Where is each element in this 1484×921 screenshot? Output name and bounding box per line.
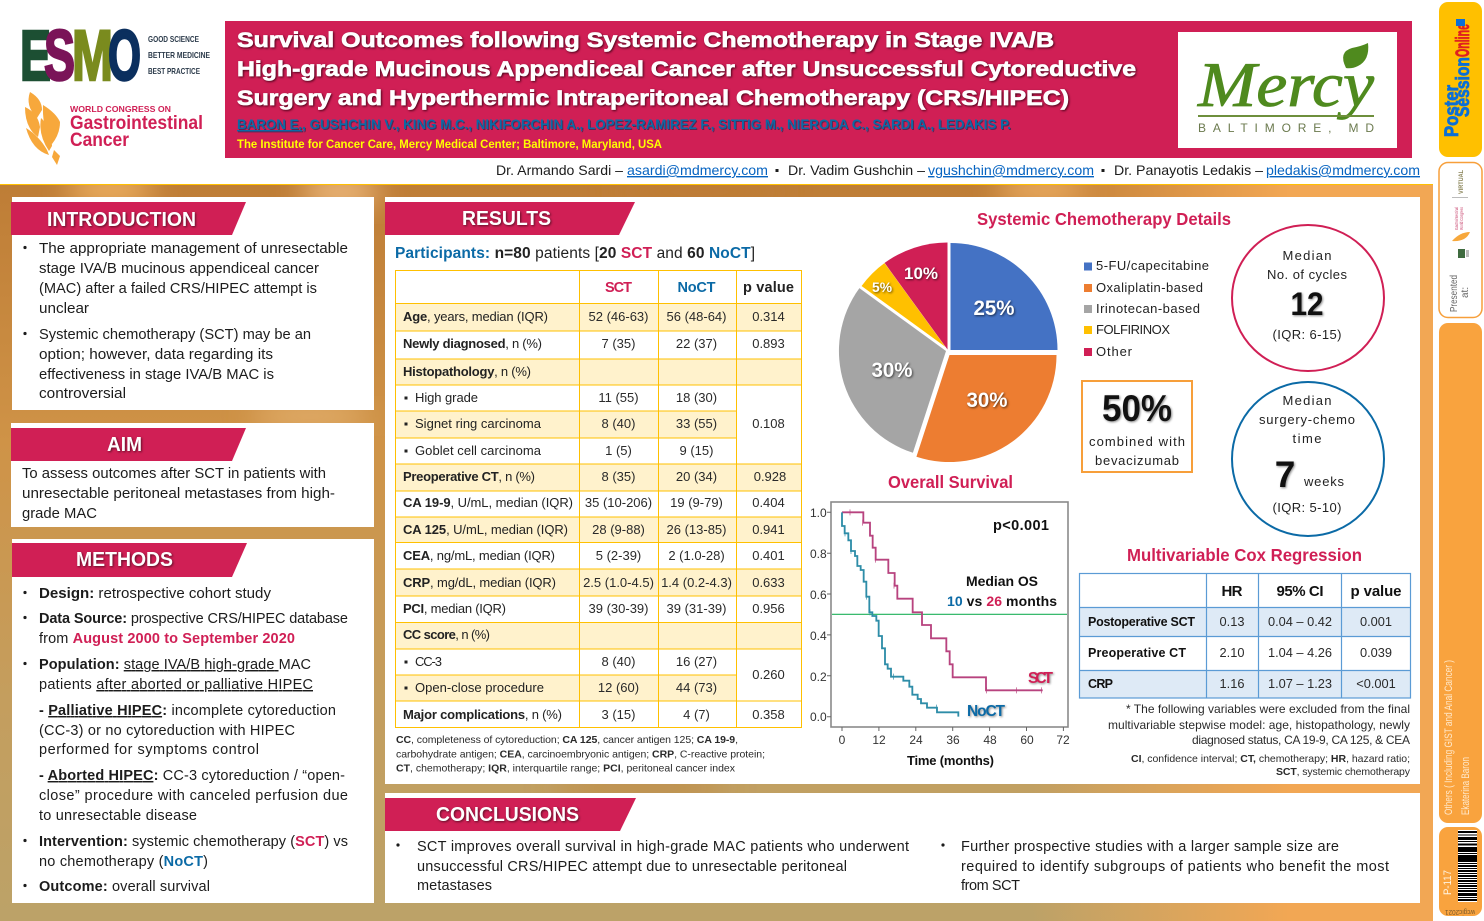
cox footnote	[1108, 702, 1410, 747]
callout: median number of cycles	[1232, 225, 1384, 371]
table values: SCT: 28 (9-88)	[592, 522, 645, 537]
logo: ESMO: BEST PRACTICE	[148, 66, 200, 76]
conclusion 1: metastases	[417, 878, 492, 894]
x axis ticks and labels: 60	[1020, 733, 1034, 747]
contact line: Dr. Panayotis Ledakis –	[1114, 162, 1263, 178]
table values: p value: 0.633	[752, 575, 785, 590]
pie chart: chemotherapy regimens: 30%	[872, 359, 913, 382]
side panel: Poster Session Online: Poster	[1442, 84, 1463, 137]
table: cox regression: 0.04 – 0.42	[1268, 614, 1332, 629]
table values: p value: 0.404	[752, 495, 785, 510]
methods bullets: patients after aborted or palliative HIPEC	[39, 677, 313, 693]
table values: p value: 0.401	[752, 548, 785, 563]
table values: p value: 0.108	[752, 416, 785, 431]
logo: Mercy Baltimore: Mercy	[1197, 49, 1375, 120]
introduction bullets: controversial	[39, 386, 126, 402]
side panel: poster number and barcode	[1439, 827, 1482, 916]
table: cox regression: 1.16	[1220, 676, 1244, 691]
introduction bullets: (MAC) after a failed CRS/HIPEC attempt is	[39, 281, 317, 297]
logo: Mercy Baltimore: BALTIMORE, MD	[1198, 121, 1374, 135]
table header	[605, 280, 794, 296]
table values: SCT: 2.5 (1.0-4.5)	[583, 575, 654, 590]
table: cox regression: 0.039	[1360, 645, 1392, 660]
methods bullets: (CC-3) or no cytoreduction with HIPEC	[39, 723, 295, 739]
row labels: Signet ring carcinoma	[415, 416, 542, 431]
introduction bullets: unclear	[39, 301, 89, 317]
table values: NoCT: 26 (13-85)	[667, 522, 726, 537]
table header: SCT	[605, 280, 632, 296]
panel: methods	[12, 539, 374, 903]
table values: p value: 0.893	[752, 336, 785, 351]
table abbreviations: CT, chemotherapy; IQR, interquartile range; PCI, peritoneal cancer index	[396, 762, 736, 774]
aim text: To assess outcomes after SCT in patients with	[22, 466, 326, 482]
table: cox regression: 1.07 – 1.23	[1268, 676, 1332, 691]
callout: median number of cycles: No. of cycles	[1267, 267, 1348, 282]
table values: SCT: 7 (35)	[602, 336, 635, 351]
y axis ticks and labels: 0.8	[810, 547, 827, 561]
heading: introduction: INTRODUCTION	[47, 209, 196, 231]
aim text: grade MAC	[22, 506, 97, 522]
title	[237, 29, 1136, 110]
table: cox regression: 1.04 – 4.26	[1268, 645, 1332, 660]
table values: p value: 0.260	[752, 667, 785, 682]
table values: NoCT: 22 (37)	[676, 336, 717, 351]
panel: conclusions	[385, 793, 1420, 903]
pie chart: chemotherapy regimens: 30%	[966, 389, 1008, 412]
row labels: CRP, mg/dL, median (IQR)	[403, 575, 556, 590]
side panel: Poster Session Online: Session	[1453, 57, 1474, 117]
table values: SCT: 5 (2-39)	[596, 548, 641, 563]
methods bullets	[23, 586, 348, 895]
logo: World Congress on Gastrointestinal Cancer: Gastrointestinal	[70, 113, 203, 134]
heading: aim: AIM	[107, 434, 142, 456]
side panel: presented at: at:	[1460, 287, 1471, 298]
row labels: High grade	[415, 390, 478, 405]
conclusion 2: Further prospective studies with a larger sample size are	[961, 839, 1339, 855]
table: cox regression: Preoperative CT	[1088, 646, 1186, 660]
median OS: Median OS	[966, 573, 1038, 589]
heading: introduction	[11, 202, 246, 235]
panel: results	[385, 197, 1420, 784]
methods bullets: from August 2000 to September 2020	[39, 631, 295, 647]
contact line: Dr. Vadim Gushchin –	[788, 162, 925, 178]
cox footnote: * The following variables were excluded from the final	[1126, 702, 1410, 716]
row labels: Open-close procedure	[415, 680, 544, 695]
introduction bullets: effectiveness in stage IVA/B MAC is	[39, 367, 274, 383]
row labels: PCI, median (IQR)	[403, 601, 506, 616]
logo: World Congress on Gastrointestinal Cancer: Cancer	[70, 130, 130, 151]
cox abbreviations: SCT, systemic chemotherapy	[1276, 766, 1411, 778]
callout: median number of cycles: (IQR: 6-15)	[1272, 327, 1342, 342]
callout: median number of cycles: 12	[1290, 286, 1324, 322]
x axis ticks and labels	[839, 727, 1070, 747]
x axis title: Time (months)	[907, 753, 994, 768]
callout: median surgery-chemo time: time	[1292, 431, 1322, 446]
pie chart: chemotherapy regimens: 5%	[872, 280, 892, 295]
methods bullets: Outcome: overall survival	[39, 879, 210, 895]
title: Surgery and Hyperthermic Intraperitoneal Chemotherapy (CRS/HIPEC)	[237, 87, 1069, 110]
logo: ESMO: GOOD SCIENCE	[148, 34, 199, 44]
conclusion 1	[396, 839, 909, 894]
table values: NoCT: 19 (9-79)	[670, 495, 723, 510]
pie chart: chemotherapy regimens: 10%	[904, 264, 938, 283]
logo: World Congress on Gastrointestinal Cancer	[25, 92, 203, 165]
contact line: vgushchin@mdmercy.com	[928, 162, 1094, 178]
row labels: Goblet cell carcinoma	[415, 443, 542, 458]
logo: ESMO	[20, 17, 210, 96]
table: cox regression: 0.001	[1360, 614, 1392, 629]
logo: ESMO: O	[108, 17, 141, 96]
grid	[395, 270, 802, 728]
callout: 50% combined with bevacizumab: bevacizumab	[1095, 453, 1179, 468]
series label: NoCT: NoCT	[967, 703, 1006, 720]
curve: NoCT	[842, 512, 958, 717]
conclusion 2: required to identify subgroups of patients who benefit the most	[961, 859, 1389, 875]
table abbreviations	[396, 734, 765, 774]
gold background	[0, 176, 1433, 921]
table: cox regression: 2.10	[1220, 645, 1244, 660]
logo: Mercy Baltimore	[1178, 32, 1397, 148]
table values: SCT	[583, 309, 654, 722]
table: cox regression: Postoperative SCT	[1088, 615, 1195, 629]
table values: p value: 0.956	[752, 601, 785, 616]
side panel: poster number and barcode: P-117	[1442, 870, 1454, 895]
table values: SCT: 1 (5)	[605, 443, 632, 458]
pie chart: chemotherapy regimens	[839, 242, 1058, 462]
y axis ticks and labels: 0.2	[810, 670, 827, 684]
side panel: topic and author: Ekaterina Baron	[1460, 757, 1472, 815]
table values: SCT: 12 (60)	[598, 680, 639, 695]
row labels: Preoperative CT, n (%)	[403, 469, 535, 484]
introduction bullets: option; however, data regarding its	[39, 347, 273, 363]
table values: NoCT: 16 (27)	[676, 654, 717, 669]
side panel: presented at: VIRTUAL	[1459, 170, 1465, 194]
table values: p value: 0.358	[752, 707, 785, 722]
heading: methods: METHODS	[76, 549, 173, 571]
heading: conclusions: CONCLUSIONS	[436, 804, 579, 826]
callout: median surgery-chemo time: (IQR: 5-10)	[1272, 500, 1342, 515]
table values: SCT: 8 (40)	[602, 416, 635, 431]
contact line: Dr. Armando Sardi –	[496, 162, 623, 178]
y axis ticks and labels: 0.4	[810, 629, 827, 643]
row labels: Major complications, n (%)	[403, 707, 562, 722]
table values: SCT: 11 (55)	[598, 390, 639, 405]
table values: NoCT	[661, 309, 732, 722]
pie legend: 5-FU/capecitabine	[1096, 258, 1209, 273]
conclusion 2	[941, 839, 1389, 894]
y axis ticks and labels: 0.0	[810, 710, 827, 724]
row labels: CC-3	[415, 654, 442, 669]
table values: NoCT: 1.4 (0.2-4.3)	[661, 575, 732, 590]
methods bullets: - Palliative HIPEC: incomplete cytoreduction	[39, 703, 336, 719]
side panel: presented at	[1439, 162, 1482, 318]
row labels: Histopathology, n (%)	[403, 364, 531, 379]
table: baseline characteristics	[395, 270, 802, 728]
table values: NoCT: 56 (48-64)	[667, 309, 726, 324]
introduction bullets	[23, 241, 348, 402]
table values: NoCT: 4 (7)	[683, 707, 710, 722]
row labels: CA 19-9, U/mL, median (IQR)	[403, 495, 573, 510]
x axis ticks and labels: 24	[909, 733, 923, 747]
heading: methods	[12, 543, 247, 577]
participants line: Participants: n=80 patients [20 SCT and 60 NoCT]	[395, 245, 755, 262]
logo: World Congress on Gastrointestinal Cancer: WORLD CONGRESS ON	[70, 104, 171, 114]
side panel: presented at: World Congress	[1459, 206, 1464, 230]
x axis ticks and labels: 36	[946, 733, 960, 747]
table values: SCT: 8 (35)	[602, 469, 635, 484]
median OS: 10 vs 26 months	[947, 593, 1057, 609]
table values: SCT: 35 (10-206)	[585, 495, 652, 510]
table values: p value	[752, 309, 786, 722]
heading: results	[385, 202, 635, 235]
logo: ESMO: E	[20, 17, 51, 96]
pie chart: chemotherapy regimens: 25%	[974, 297, 1015, 320]
methods bullets: Design: retrospective cohort study	[39, 586, 272, 602]
table values: SCT: 3 (15)	[602, 707, 635, 722]
side panel: topic and author: Others ( Including GIST and Anal Cancer )	[1443, 660, 1455, 815]
methods bullets: Data Source: prospective CRS/HIPEC database	[39, 611, 348, 627]
table header: NoCT	[678, 280, 716, 296]
x axis ticks and labels: 0	[839, 733, 846, 747]
logo: ESMO: S	[44, 17, 75, 96]
contact line	[496, 162, 1420, 178]
methods bullets: - Aborted HIPEC: CC-3 cytoreduction / “open-	[39, 768, 345, 784]
heading: multivariable cox regression: Multivariable Cox Regression	[1127, 545, 1362, 565]
title: High-grade Mucinous Appendiceal Cancer after Unsuccessful Cytoreductive	[237, 58, 1136, 81]
heading: conclusions	[385, 798, 636, 831]
x axis ticks and labels: 48	[983, 733, 997, 747]
methods bullets: Population: stage IVA/B high-grade MAC	[39, 657, 311, 673]
callout: median surgery-chemo time: 7	[1275, 454, 1295, 495]
cox abbreviations	[1131, 753, 1411, 778]
table values: NoCT: 33 (55)	[676, 416, 717, 431]
table values: NoCT: 44 (73)	[676, 680, 717, 695]
side panel: presented at: Gastrointestinal	[1454, 207, 1459, 230]
callout: 50% combined with bevacizumab: 50%	[1102, 388, 1172, 429]
table values: SCT: 8 (40)	[602, 654, 635, 669]
cox abbreviations: CI, confidence interval; CT, chemotherapy; HR, hazard ratio;	[1131, 753, 1410, 765]
conclusion 2: from SCT	[961, 878, 1020, 894]
contact line: asardi@mdmercy.com	[627, 162, 768, 178]
table: cox regression: p value	[1350, 583, 1402, 600]
median OS	[947, 573, 1057, 609]
side panel: topic and author	[1439, 323, 1482, 823]
methods bullets: no chemotherapy (NoCT)	[39, 854, 208, 870]
table values: NoCT: 2 (1.0-28)	[668, 548, 725, 563]
aim text: unresectable peritoneal metastases from high-	[22, 486, 335, 502]
methods bullets: Intervention: systemic chemotherapy (SCT) vs	[39, 834, 348, 850]
heading: overall survival: Overall Survival	[888, 472, 1013, 492]
logo: ESMO: BETTER MEDICINE	[148, 50, 210, 60]
y axis ticks and labels	[810, 506, 831, 724]
row labels: CA 125, U/mL, median (IQR)	[403, 522, 568, 537]
x axis ticks and labels: 72	[1056, 733, 1070, 747]
table values: NoCT: 18 (30)	[676, 390, 717, 405]
table: cox regression: 0.13	[1220, 614, 1244, 629]
side panel: Poster Session Online	[1439, 2, 1482, 157]
callout: median surgery-chemo time: Median	[1282, 393, 1332, 408]
conclusion 1: unsuccessful CRS/HIPEC attempt due to unresectable peritoneal	[417, 859, 847, 875]
panel: introduction	[11, 197, 374, 410]
callout: median surgery-chemo time: weeks	[1303, 474, 1344, 489]
row labels: Newly diagnosed, n (%)	[403, 336, 542, 351]
table: cox regression	[1080, 574, 1410, 698]
barcode	[1458, 830, 1477, 902]
pie legend: Other	[1096, 344, 1133, 359]
row labels: Age, years, median (IQR)	[403, 309, 548, 324]
methods bullets: performed for symptoms control	[39, 742, 259, 758]
table values: SCT: 39 (30-39)	[589, 601, 648, 616]
table: cox regression: HR	[1222, 583, 1243, 600]
aim text	[22, 466, 335, 522]
callout: median number of cycles: Median	[1282, 248, 1332, 263]
authors: BARON E., GUSHCHIN V., KING M.C., NIKIFORCHIN A., LOPEZ-RAMIREZ F., SITTIG M., NIERODA C., SARDI A., LEDAKIS P.	[237, 116, 1011, 132]
table values: NoCT: 20 (34)	[676, 469, 717, 484]
callout: median surgery-chemo time: surgery-chemo	[1259, 412, 1355, 427]
affiliation: The Institute for Cancer Care, Mercy Medical Center; Baltimore, Maryland, USA	[237, 137, 662, 151]
chart: Kaplan-Meier overall survival	[810, 502, 1070, 768]
conclusion 1: SCT improves overall survival in high-grade MAC patients who underwent	[417, 839, 909, 855]
curve: SCT	[842, 509, 1043, 693]
cox footnote: diagnosed status, CA 19-9, CA 125, & CEA	[1192, 733, 1410, 747]
table values: NoCT: 39 (31-39)	[667, 601, 726, 616]
row labels: CC score, n (%)	[403, 627, 490, 642]
x axis ticks and labels: 12	[872, 733, 886, 747]
table values: SCT: 52 (46-63)	[589, 309, 648, 324]
y axis ticks and labels: 0.6	[810, 588, 827, 602]
table: cox regression: 95% CI	[1276, 583, 1324, 600]
table values: p value: 0.941	[752, 522, 785, 537]
title: Survival Outcomes following Systemic Chemotherapy in Stage IVA/B	[237, 29, 1054, 52]
methods bullets: to unresectable disease	[39, 808, 197, 824]
series label: SCT: SCT	[1028, 670, 1054, 687]
cox footnote: multivariable stepwise model: age, histopathology, newly	[1108, 718, 1410, 732]
table header: p value	[743, 280, 794, 296]
row labels	[403, 309, 573, 722]
callout: 50% combined with bevacizumab: combined with	[1089, 434, 1185, 449]
pie legend: FOLFIRINOX	[1096, 322, 1170, 337]
contact line: pledakis@mdmercy.com	[1266, 162, 1420, 178]
callout: 50% combined with bevacizumab	[1082, 381, 1192, 472]
heading: results: RESULTS	[462, 208, 551, 230]
introduction bullets: stage IVA/B mucinous appendiceal cancer	[39, 261, 319, 277]
table: cox regression: CRP	[1088, 677, 1113, 691]
pie legend	[1084, 258, 1209, 359]
heading: aim	[11, 428, 246, 461]
table abbreviations: carbohydrate antigen; CEA, carcinoembryonic antigen; CRP, C-reactive protein;	[396, 748, 765, 760]
barcode caption: wcgic2021	[1445, 908, 1476, 915]
pie legend: Oxaliplatin-based	[1096, 280, 1203, 295]
heading: systemic chemotherapy details: Systemic Chemotherapy Details	[977, 209, 1231, 229]
pie legend: Irinotecan-based	[1096, 301, 1200, 316]
table abbreviations: CC, completeness of cytoreduction; CA 125, cancer antigen 125; CA 19-9,	[396, 734, 738, 746]
row labels: CEA, ng/mL, median (IQR)	[403, 548, 555, 563]
median reference line	[832, 613, 1067, 615]
table values: NoCT: 9 (15)	[680, 443, 713, 458]
p value: p<0.001	[993, 518, 1049, 534]
methods bullets: close” procedure with canceled perfusion due	[39, 788, 348, 804]
introduction bullets: The appropriate management of unresectable	[39, 241, 348, 257]
logo: ESMO: M	[72, 17, 113, 96]
icon: wheat	[25, 92, 60, 165]
introduction bullets: Systemic chemotherapy (SCT) may be an	[39, 327, 311, 343]
callout: median surgery-chemo time	[1232, 382, 1384, 536]
panel: aim	[11, 423, 374, 527]
side panel: presented at: Presented	[1449, 275, 1460, 312]
table: cox regression: <0.001	[1356, 676, 1396, 691]
title banner	[225, 21, 1412, 158]
y axis ticks and labels: 1.0	[810, 506, 827, 520]
shaded rows	[395, 304, 802, 701]
table values: p value: 0.928	[754, 469, 786, 484]
table values: p value: 0.314	[752, 309, 785, 324]
